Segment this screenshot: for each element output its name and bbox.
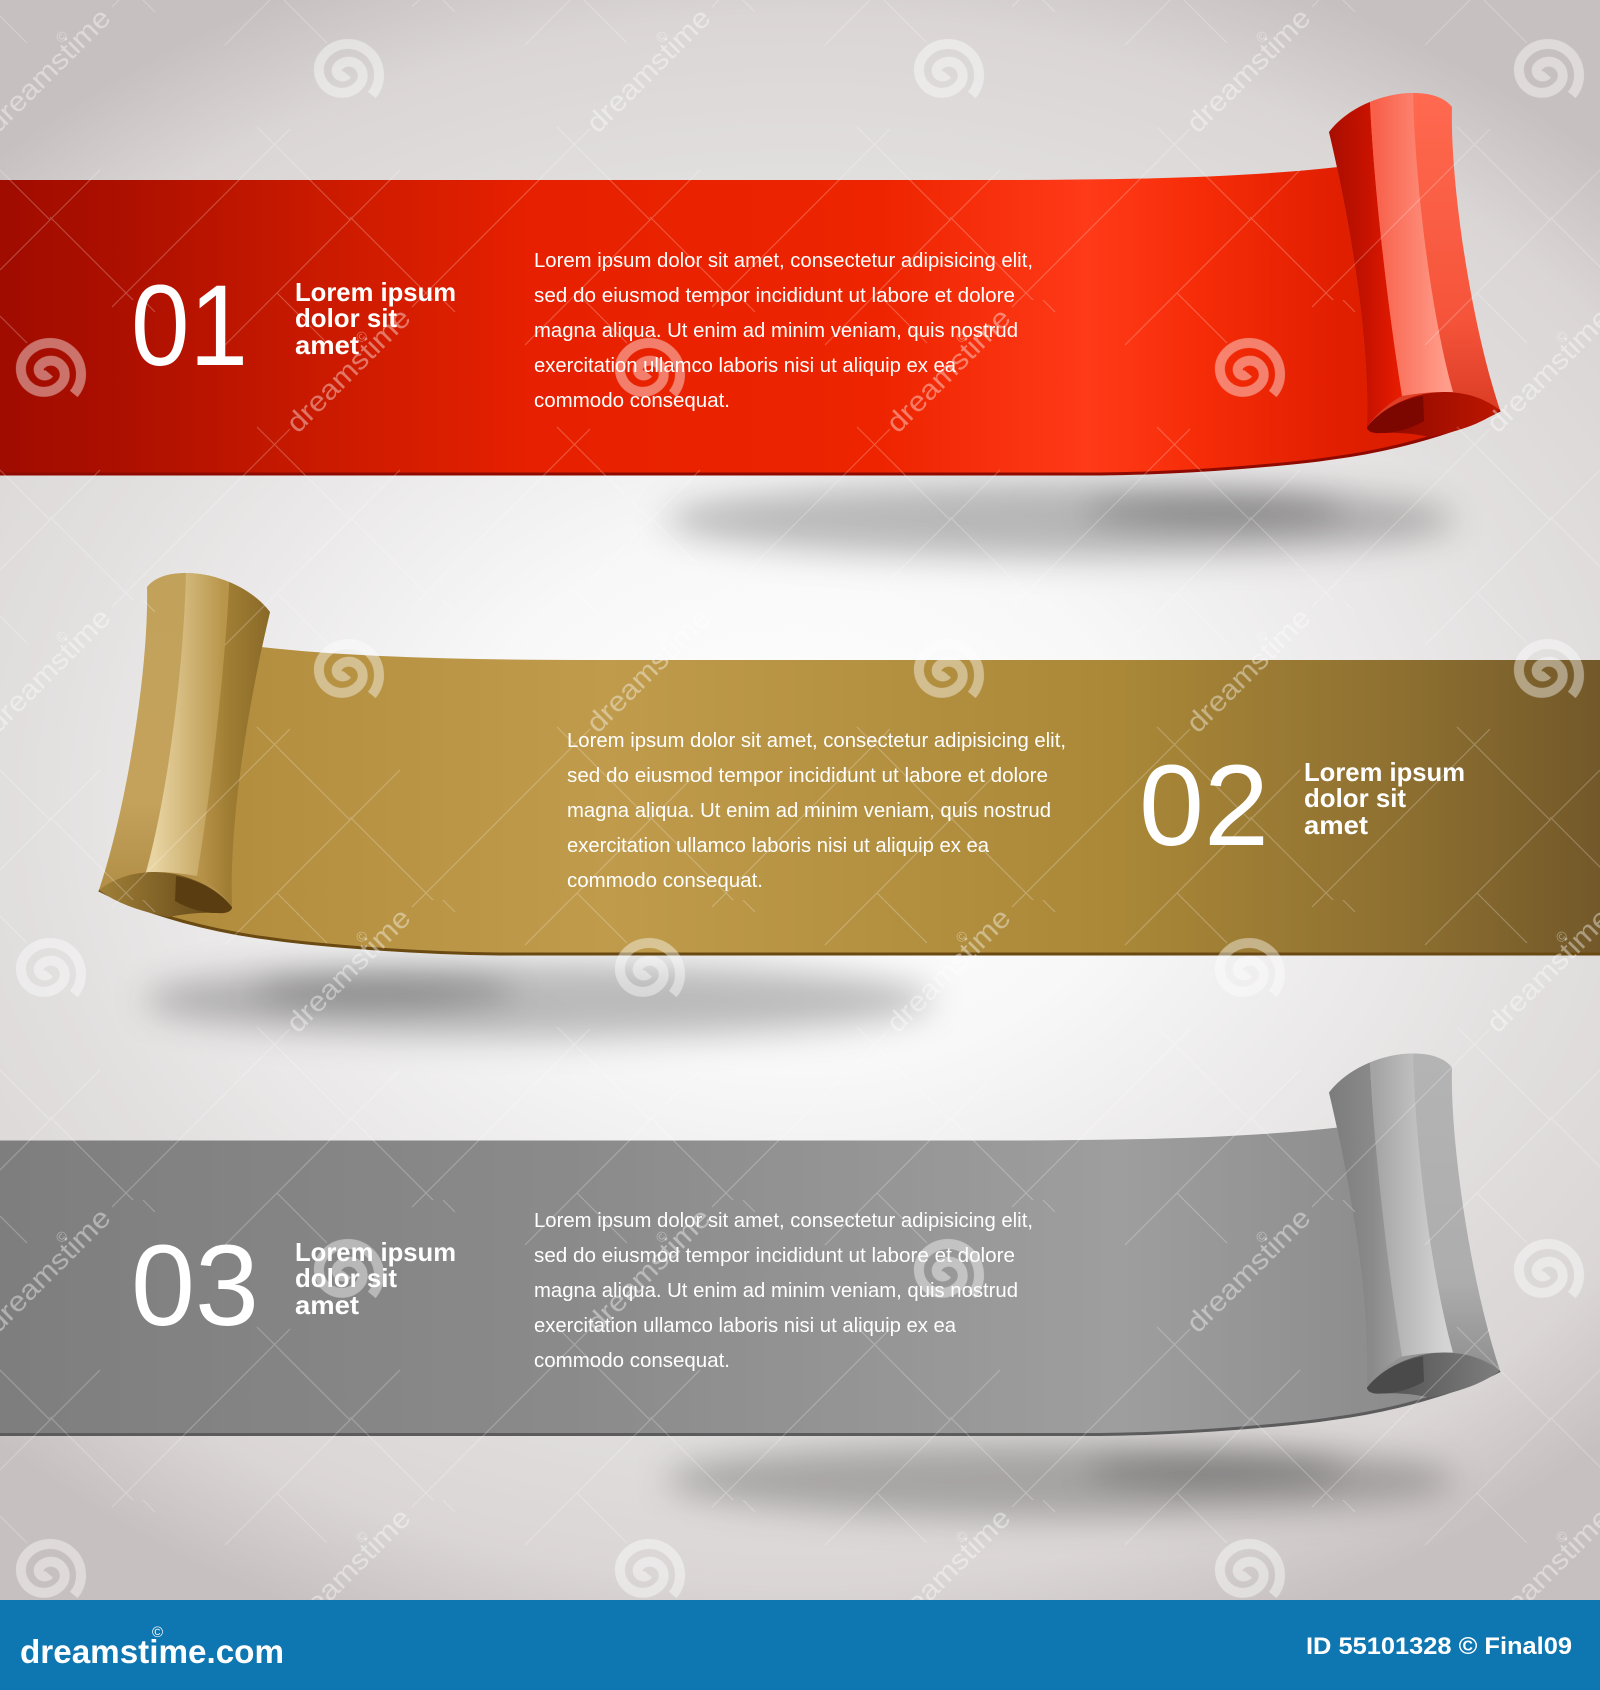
footer logo: dreamstime.com (20, 1633, 284, 1670)
body text 01: sed do eiusmod tempor incididunt ut labore et dolore (534, 284, 1015, 307)
number 01: 01 (131, 262, 248, 390)
body text 01: exercitation ullamco laboris nisi ut aliquip ex ea (534, 354, 957, 377)
watermark text: dreamstime (1180, 1202, 1317, 1339)
heading 03: dolor sit (295, 1263, 397, 1293)
watermark text: © (652, 627, 671, 646)
watermark text: © (352, 1527, 371, 1546)
watermark text: © (52, 27, 71, 46)
shadow under gray ribbon (665, 1442, 1455, 1518)
watermark text: dreamstime (880, 1502, 1017, 1639)
watermark text: dreamstime (1180, 602, 1317, 739)
body text 02: exercitation ullamco laboris nisi ut aliquip ex ea (567, 834, 990, 857)
watermark text: © (952, 1527, 971, 1546)
heading 03: Lorem ipsum (295, 1237, 456, 1267)
watermark text: dreamstime (280, 902, 417, 1039)
red ribbon (0, 93, 1500, 474)
footer credit: ID 55101328 © Final09 (1306, 1633, 1572, 1660)
panel 02 text (567, 729, 1465, 892)
number 02: 02 (1139, 742, 1269, 870)
body text 03 (534, 1209, 1033, 1372)
body text 02: sed do eiusmod tempor incididunt ut labore et dolore (567, 764, 1048, 787)
watermark text: © (1252, 27, 1271, 46)
panel 01 text (131, 249, 1033, 412)
heading 01: amet (295, 330, 359, 360)
footer logo: © (152, 1624, 163, 1641)
body text 01 (534, 249, 1033, 412)
watermark text: dreamstime (880, 302, 1017, 439)
shadow under gold ribbon (144, 962, 934, 1038)
heading 02: amet (1304, 810, 1368, 840)
gold ribbon (99, 573, 1600, 954)
footer bar (0, 1600, 1600, 1690)
heading 02: dolor sit (1304, 783, 1406, 813)
watermark text: © (352, 927, 371, 946)
watermark text: dreamstime (580, 602, 717, 739)
body text 02: Lorem ipsum dolor sit amet, consectetur adipisicing elit, (567, 729, 1066, 752)
heading 03: amet (295, 1290, 359, 1320)
watermark text: © (1552, 327, 1571, 346)
body text 01: commodo consequat. (534, 389, 730, 412)
watermark text: dreamstime (280, 1502, 417, 1639)
panel 03 text (131, 1209, 1033, 1372)
watermark text: © (352, 327, 371, 346)
watermark text: dreamstime (280, 302, 417, 439)
body text 02: magna aliqua. Ut enim ad minim veniam, quis nostrud (567, 799, 1051, 822)
body text 03: Lorem ipsum dolor sit amet, consectetur adipisicing elit, (534, 1209, 1033, 1232)
heading 01: Lorem ipsum (295, 277, 456, 307)
gold roll (99, 573, 270, 917)
gray ribbon (0, 1054, 1500, 1434)
watermark text: © (52, 1227, 71, 1246)
heading 01: dolor sit (295, 303, 397, 333)
heading 02 (1304, 757, 1465, 840)
gray roll (1329, 1054, 1500, 1398)
heading 02: Lorem ipsum (1304, 757, 1465, 787)
watermark text: © (1252, 1227, 1271, 1246)
watermark text: © (1552, 1527, 1571, 1546)
watermark text: © (652, 27, 671, 46)
body text 03: commodo consequat. (534, 1349, 730, 1372)
number 03: 03 (131, 1222, 259, 1350)
body text 01: magna aliqua. Ut enim ad minim veniam, quis nostrud (534, 319, 1018, 342)
body text 02: commodo consequat. (567, 869, 763, 892)
heading 01 (295, 277, 456, 360)
heading 03 (295, 1237, 456, 1320)
watermark text: © (52, 627, 71, 646)
watermark text: dreamstime (880, 902, 1017, 1039)
watermark text: © (1552, 927, 1571, 946)
watermark text: dreamstime (580, 2, 717, 139)
watermark text: © (952, 327, 971, 346)
body text 01: Lorem ipsum dolor sit amet, consectetur adipisicing elit, (534, 249, 1033, 272)
watermark text: dreamstime (580, 1202, 717, 1339)
body text 03: exercitation ullamco laboris nisi ut aliquip ex ea (534, 1314, 957, 1337)
body text 02 (567, 729, 1066, 892)
body text 03: sed do eiusmod tempor incididunt ut labore et dolore (534, 1244, 1015, 1267)
red roll (1329, 93, 1500, 437)
watermark text: © (652, 1227, 671, 1246)
watermark text: © (952, 927, 971, 946)
shadow under red ribbon (665, 482, 1455, 558)
watermark text: dreamstime (1180, 2, 1317, 139)
watermark text: © (1252, 627, 1271, 646)
body text 03: magna aliqua. Ut enim ad minim veniam, quis nostrud (534, 1279, 1018, 1302)
